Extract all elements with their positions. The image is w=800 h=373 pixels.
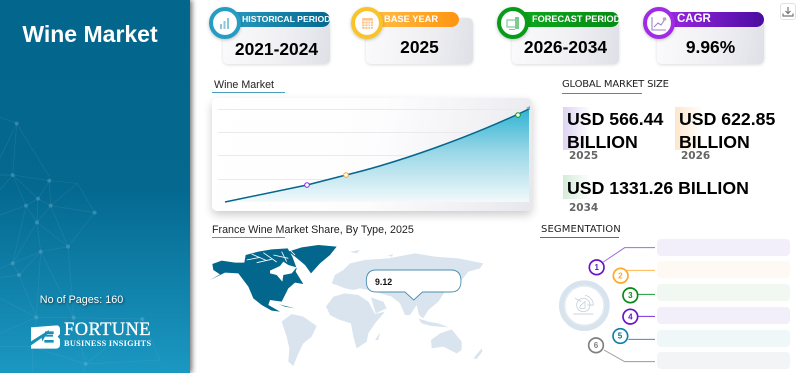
- heading: map share: France Wine Market Share, By Type, 2025: [212, 224, 414, 236]
- icon: forecast chart: [497, 7, 529, 39]
- colour tint: [563, 107, 591, 150]
- year: 2034: [569, 202, 598, 214]
- label pill: [225, 12, 330, 27]
- segment bar 5: [657, 330, 790, 347]
- number badges: [589, 260, 638, 353]
- market size 2025: [563, 107, 664, 162]
- stat card: CAGR: [642, 6, 765, 66]
- South America: [282, 314, 317, 366]
- segment bar 6: [657, 352, 790, 369]
- value: 2021-2024: [235, 39, 318, 59]
- label pill: HISTORICAL PERIOD: [242, 14, 330, 24]
- download button: [780, 3, 796, 20]
- stat card: base year: [350, 6, 474, 66]
- value: [679, 109, 775, 152]
- value: [567, 109, 664, 152]
- number badges: 2: [618, 271, 623, 280]
- value: 9.96%: [686, 37, 735, 57]
- North America highlighted: [210, 245, 337, 312]
- segment bar 4: [657, 307, 790, 324]
- network pattern: [0, 117, 160, 373]
- number badges: 4: [628, 312, 633, 321]
- number badges: 1: [594, 263, 599, 272]
- colour tint: [675, 107, 703, 150]
- area chart: [218, 106, 530, 203]
- market size 2026: [675, 107, 775, 162]
- market size 2034: [563, 175, 749, 214]
- logo: [31, 320, 151, 349]
- value: [366, 18, 473, 64]
- value: 2025: [400, 37, 439, 57]
- number badges: 5: [618, 332, 623, 341]
- callout: 9.12: [375, 277, 392, 287]
- year: 2025: [569, 150, 598, 162]
- logo mark: [31, 325, 60, 349]
- value: [223, 18, 330, 64]
- icon: growth chart: [643, 7, 675, 39]
- heading: global market size: GLOBAL MARKET SIZE: [562, 79, 669, 90]
- label pill: BASE YEAR: [384, 14, 438, 24]
- year: 2026: [681, 150, 710, 162]
- segment bar 3: [657, 284, 790, 301]
- sidebar panel: [0, 0, 190, 373]
- value: 2026-2034: [524, 37, 607, 57]
- page count: No of Pages: 160: [40, 294, 123, 306]
- segmentation diagram: [559, 247, 655, 362]
- number badges: 3: [628, 291, 633, 300]
- logo wordmark: FORTUNE: [64, 320, 151, 340]
- label pill: FORECAST PERIOD: [532, 14, 620, 24]
- segment bar 2: [657, 261, 790, 278]
- label pill: [658, 12, 764, 27]
- label pill: [367, 12, 459, 27]
- icon: calendar: [351, 7, 383, 39]
- value: BILLION: [567, 132, 638, 152]
- number badges: 6: [594, 341, 599, 350]
- value: [657, 18, 764, 64]
- value: BILLION: [679, 132, 750, 152]
- stat card: forecast period: [496, 6, 620, 66]
- stat card: historical period: [208, 6, 331, 66]
- label pill: [514, 12, 619, 27]
- title: Wine Market: [22, 21, 158, 47]
- label pill: CAGR: [677, 13, 711, 25]
- value: USD 1331.26 BILLION: [567, 178, 749, 198]
- central hub icon: [562, 283, 607, 328]
- heading: segmentation: SEGMENTATION: [541, 224, 621, 235]
- icon: bar chart: [209, 7, 241, 39]
- colour tint: [563, 175, 591, 199]
- logo tagline: BUSINESS INSIGHTS: [64, 339, 151, 348]
- value: [512, 18, 619, 64]
- callout: [366, 270, 461, 300]
- connector lines: [603, 248, 655, 362]
- heading: wine market: Wine Market: [214, 79, 274, 91]
- value: USD 566.44: [567, 109, 663, 129]
- other continents: [326, 250, 483, 359]
- panel: area chart: [212, 98, 532, 211]
- value: USD 622.85: [679, 109, 775, 129]
- icon: download: [782, 7, 794, 17]
- segment bar 1: [657, 239, 790, 256]
